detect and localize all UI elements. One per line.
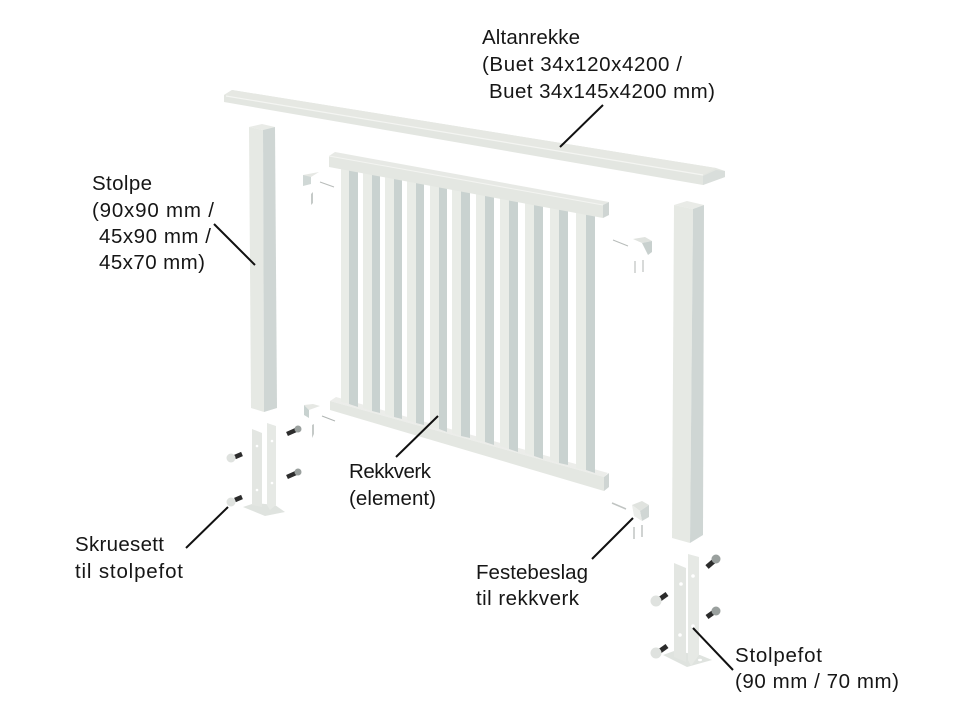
balusters	[341, 165, 595, 473]
leader line: stolpe	[214, 224, 255, 265]
top rail: altanrekke	[224, 90, 725, 185]
leader line: skruesett	[186, 507, 228, 548]
label: stolpefot	[735, 644, 899, 693]
leader line: rekkverk	[396, 416, 438, 457]
post: right stolpe	[672, 201, 704, 543]
label: altanrekke: (Buet 34x120x4200 /	[482, 53, 682, 76]
label: rekkverk	[349, 460, 436, 510]
upper rail	[329, 152, 609, 218]
label: altanrekke: Buet 34x145x4200 mm)	[489, 80, 715, 103]
post foot: right, stolpefot	[663, 554, 712, 667]
post foot: left	[243, 423, 285, 516]
leader line: altanrekke	[560, 105, 603, 147]
railing element: rekkverk	[329, 152, 609, 491]
lower rail	[330, 397, 609, 491]
label: stolpe	[92, 172, 214, 274]
label: stolpe: Stolpe	[92, 172, 152, 195]
bracket set: bottom right, festebeslag	[612, 501, 649, 539]
label: festebeslag: til rekkverk	[476, 587, 580, 610]
label: stolpe: 45x70 mm)	[99, 251, 205, 274]
label: altanrekke: Altanrekke	[482, 26, 580, 49]
post: left stolpe	[249, 124, 277, 412]
label: stolpe: (90x90 mm /	[92, 199, 214, 222]
screw set: right foot	[650, 554, 720, 658]
label: rekkverk: (element)	[349, 487, 436, 510]
label: skruesett	[75, 533, 183, 583]
label: rekkverk: Rekkverk	[349, 460, 432, 483]
label: stolpe: 45x90 mm /	[99, 225, 211, 248]
label: altanrekke	[482, 26, 715, 103]
label: stolpefot: Stolpefot	[735, 644, 822, 667]
label: stolpefot: (90 mm / 70 mm)	[735, 670, 899, 693]
label: skruesett: Skruesett	[75, 533, 164, 556]
label: festebeslag	[476, 561, 588, 610]
bracket set: top right	[613, 237, 652, 273]
bracket set: top left	[303, 172, 334, 205]
bracket set: bottom left	[304, 404, 335, 438]
leader line: stolpefot	[693, 628, 733, 670]
label: festebeslag: Festebeslag	[476, 561, 588, 584]
label: skruesett: til stolpefot	[75, 560, 183, 583]
leader line: festebeslag	[592, 518, 633, 559]
screw set: left foot, skruesett	[226, 426, 302, 506]
